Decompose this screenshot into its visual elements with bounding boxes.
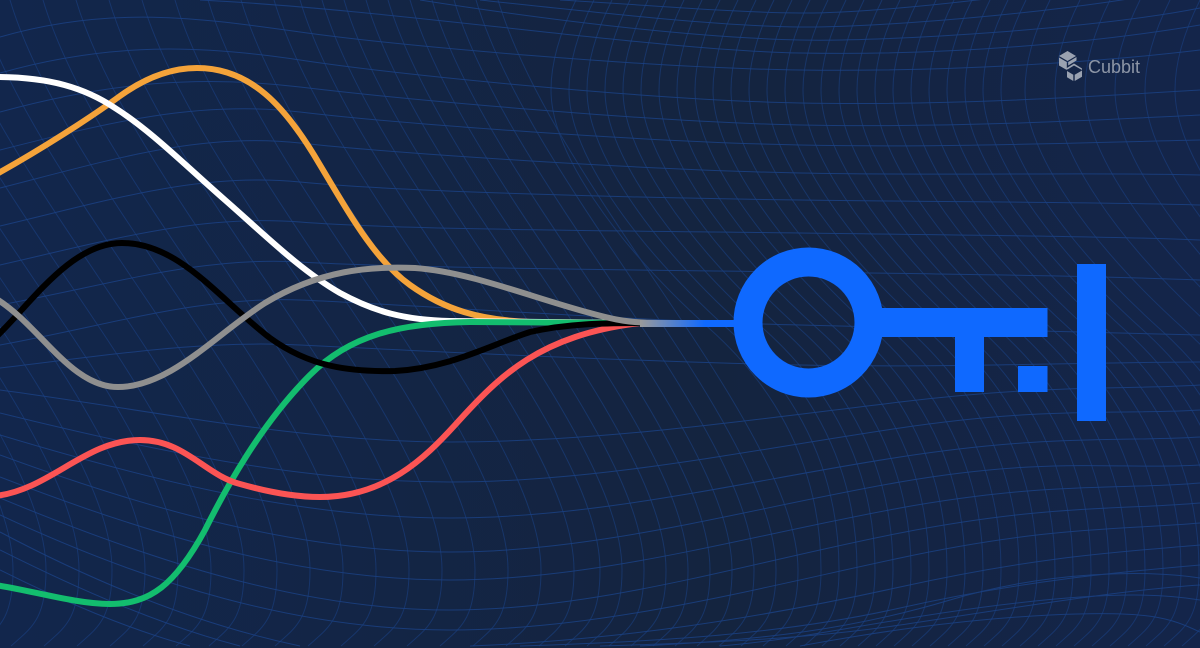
logo wordmark: Cubbit: [1088, 57, 1140, 77]
icon: text cursor bar: [1077, 264, 1106, 421]
curve: white line: [0, 77, 640, 323]
curve: black line: [0, 243, 650, 371]
icon: key: [748, 262, 1048, 392]
curve: red line: [0, 323, 640, 497]
curve: orange line: [0, 68, 640, 323]
key shaft: [878, 308, 1048, 337]
curve: green line: [0, 322, 640, 604]
icon: Cubbit cube: [1059, 51, 1082, 81]
key ring: [748, 262, 869, 383]
logo: Cubbit: [1059, 51, 1140, 81]
curve: grey line: [0, 268, 660, 387]
key square tooth: [1018, 366, 1048, 392]
key tooth: [955, 337, 984, 392]
key connector line: grey to blue: [640, 320, 740, 327]
